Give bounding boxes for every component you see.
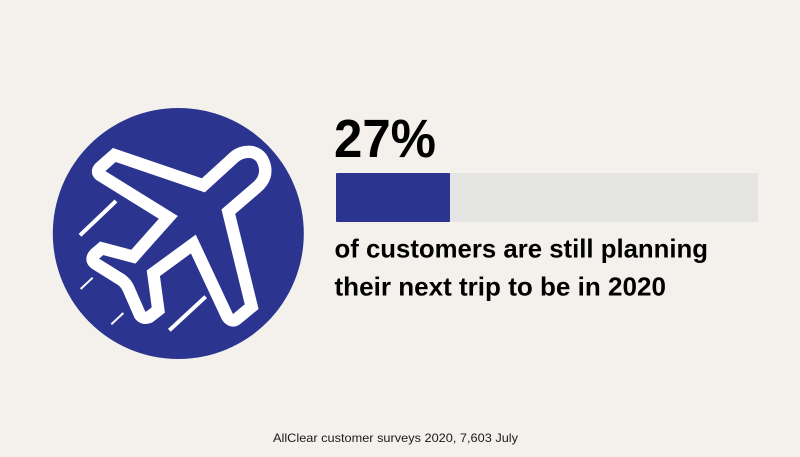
description text — [334, 234, 708, 302]
progress bar — [336, 173, 758, 222]
progress bar track — [336, 173, 758, 222]
progress bar fill — [336, 173, 450, 222]
description text: their next trip to be in 2020 — [334, 272, 666, 302]
heading: 27%: 27% — [334, 109, 436, 169]
source note: AllClear customer surveys 2020, 7,603 July — [273, 431, 518, 445]
description text: of customers are still planning — [334, 234, 708, 264]
icon: speed lines — [80, 201, 206, 330]
icon: airplane in blue circle — [53, 108, 304, 359]
icon: airplane outline — [92, 152, 265, 320]
